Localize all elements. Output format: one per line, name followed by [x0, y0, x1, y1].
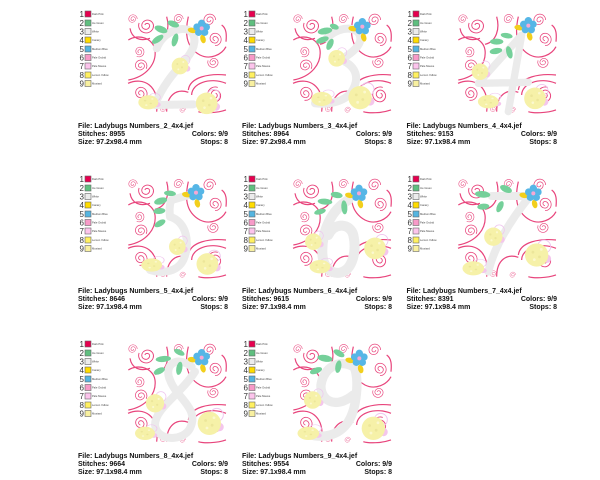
legend: White: [92, 194, 99, 198]
legend: [244, 10, 273, 88]
caption: [242, 453, 392, 476]
legend: Canary: [92, 368, 101, 372]
legend: 1: [408, 175, 413, 184]
caption: Size: 97.2x98.4 mm: [242, 139, 306, 146]
legend: Canary: [420, 203, 429, 207]
legend: Medium Blue: [92, 47, 108, 51]
legend: 8: [408, 236, 413, 245]
caption: Colors: 9/9: [521, 296, 557, 303]
legend: Pale Orchid: [92, 220, 107, 224]
legend: 9: [80, 80, 85, 88]
legend: 6: [408, 218, 413, 228]
legend: Pale Orchid: [256, 56, 271, 60]
legend: 2: [244, 184, 249, 193]
legend: Mustard: [420, 246, 430, 250]
legend: Medium Blue: [420, 47, 436, 51]
legend: 1: [244, 10, 249, 19]
legend: 3: [244, 358, 249, 366]
legend: 5: [244, 210, 249, 219]
legend: Pale Orchid: [92, 56, 107, 60]
caption: Colors: 9/9: [521, 131, 557, 138]
legend: 9: [244, 80, 249, 88]
caption: Stitches: 8646: [78, 296, 125, 303]
artwork: digit 9: [293, 344, 391, 443]
legend: 1: [408, 10, 413, 19]
legend: White: [92, 30, 99, 34]
legend: 6: [244, 384, 249, 392]
legend: [244, 175, 273, 254]
legend: 1: [80, 10, 85, 19]
legend: Pale Mauve: [92, 64, 107, 68]
legend: Canary: [420, 38, 429, 42]
legend: Dark Pink: [420, 177, 432, 181]
artwork: digit 4: [458, 14, 556, 113]
legend: 9: [80, 410, 85, 418]
legend: 5: [244, 45, 249, 54]
legend: Pale Orchid: [420, 220, 435, 224]
caption: [242, 288, 392, 311]
legend: Ice Green: [256, 21, 268, 25]
legend: 5: [408, 210, 413, 219]
legend: [244, 340, 273, 418]
caption: Stops: 8: [200, 469, 228, 476]
legend: 8: [244, 401, 249, 410]
legend: 1: [244, 340, 249, 349]
caption: Stitches: 8391: [406, 296, 454, 303]
legend: 5: [408, 45, 413, 54]
legend: 3: [80, 192, 85, 202]
legend: Pale Orchid: [256, 386, 271, 390]
caption: Colors: 9/9: [356, 296, 392, 303]
legend: 6: [80, 54, 85, 62]
caption: Stops: 8: [529, 139, 557, 146]
legend: Ice Green: [92, 351, 104, 355]
legend: 5: [80, 45, 85, 54]
caption: File: Ladybugs Numbers_7_4x4.jef: [406, 288, 522, 295]
legend: [80, 10, 109, 88]
panel: Ladybugs Numbers 8: [78, 340, 228, 476]
legend: Mustard: [92, 412, 102, 416]
caption: File: Ladybugs Numbers_4_4x4.jef: [406, 123, 522, 130]
legend: Pale Mauve: [92, 229, 107, 233]
artwork: digit 5: [128, 179, 226, 278]
caption: [242, 123, 392, 146]
caption: [406, 288, 557, 311]
artwork: digit 3: [293, 14, 391, 113]
legend: 7: [80, 62, 85, 71]
caption: [78, 288, 228, 311]
legend: 7: [244, 227, 249, 236]
legend: 6: [408, 54, 413, 62]
legend: Canary: [92, 38, 101, 42]
caption: Size: 97.1x98.4 mm: [78, 469, 142, 476]
caption: Colors: 9/9: [192, 296, 228, 303]
panel: Ladybugs Numbers 3: [242, 10, 392, 146]
legend: Medium Blue: [92, 212, 108, 216]
legend: 4: [80, 36, 85, 45]
legend: 3: [408, 192, 413, 202]
legend: Ice Green: [92, 186, 104, 190]
caption: Stitches: 9664: [78, 461, 125, 468]
legend: 9: [80, 244, 85, 254]
legend: Dark Pink: [92, 342, 104, 346]
legend: 4: [80, 366, 85, 375]
legend: 7: [244, 392, 249, 401]
caption: [406, 123, 557, 146]
legend: Lemon Yellow: [92, 403, 109, 407]
legend: Pale Mauve: [92, 394, 107, 398]
legend: 7: [80, 227, 85, 236]
legend: 2: [244, 19, 249, 28]
legend: Mustard: [256, 82, 266, 86]
legend: 9: [244, 410, 249, 418]
legend: 4: [244, 366, 249, 375]
legend: 6: [244, 218, 249, 228]
legend: White: [420, 30, 427, 34]
legend: 2: [408, 184, 413, 193]
legend: 7: [408, 227, 413, 236]
legend: [408, 175, 437, 254]
caption: Stops: 8: [200, 304, 228, 311]
panel: Ladybugs Numbers 7: [406, 175, 557, 311]
legend: Ice Green: [92, 21, 104, 25]
caption: Size: 97.1x98.4 mm: [406, 139, 470, 146]
legend: 4: [408, 36, 413, 45]
legend: Dark Pink: [256, 12, 268, 16]
caption: Size: 97.1x98.4 mm: [242, 469, 306, 476]
legend: 4: [408, 201, 413, 210]
legend: Medium Blue: [420, 212, 436, 216]
legend: Pale Mauve: [420, 229, 435, 233]
legend: 5: [244, 375, 249, 384]
legend: 8: [244, 236, 249, 245]
legend: White: [256, 30, 263, 34]
legend: Medium Blue: [92, 377, 108, 381]
caption: Size: 97.1x98.4 mm: [242, 304, 306, 311]
legend: Lemon Yellow: [256, 73, 273, 77]
legend: Ice Green: [420, 186, 432, 190]
legend: White: [256, 194, 263, 198]
legend: 4: [244, 201, 249, 210]
legend: 2: [244, 349, 249, 358]
legend: 9: [408, 244, 413, 254]
caption: Stitches: 9615: [242, 296, 289, 303]
caption: File: Ladybugs Numbers_2_4x4.jef: [78, 123, 194, 130]
artwork: digit 8: [128, 344, 226, 443]
legend: 2: [80, 19, 85, 28]
caption: Stitches: 9153: [406, 131, 454, 138]
legend: Pale Orchid: [256, 220, 271, 224]
panel: Ladybugs Numbers 2: [78, 10, 228, 146]
caption: Stitches: 9554: [242, 461, 289, 468]
legend: 1: [80, 340, 85, 349]
caption: [78, 123, 228, 146]
legend: Medium Blue: [256, 377, 272, 381]
legend: 8: [80, 71, 85, 80]
legend: 6: [80, 384, 85, 392]
legend: Lemon Yellow: [92, 238, 109, 242]
legend: Mustard: [92, 82, 102, 86]
legend: Medium Blue: [256, 47, 272, 51]
legend: 6: [244, 54, 249, 62]
legend: Lemon Yellow: [92, 73, 109, 77]
legend: Lemon Yellow: [256, 238, 273, 242]
caption: Size: 97.1x98.4 mm: [406, 304, 470, 311]
legend: 1: [244, 175, 249, 184]
caption: File: Ladybugs Numbers_3_4x4.jef: [242, 123, 358, 130]
legend: Dark Pink: [256, 342, 268, 346]
caption: File: Ladybugs Numbers_6_4x4.jef: [242, 288, 358, 295]
legend: 2: [80, 184, 85, 193]
legend: Mustard: [92, 246, 102, 250]
caption: File: Ladybugs Numbers_8_4x4.jef: [78, 453, 194, 460]
panel: Ladybugs Numbers 5: [78, 175, 228, 311]
legend: Ice Green: [256, 351, 268, 355]
legend: Canary: [256, 203, 265, 207]
panel: Ladybugs Numbers 9: [242, 340, 392, 476]
legend: [80, 175, 109, 254]
caption: Colors: 9/9: [356, 461, 392, 468]
legend: Lemon Yellow: [420, 238, 437, 242]
caption: Colors: 9/9: [356, 131, 392, 138]
legend: 1: [80, 175, 85, 184]
legend: 3: [244, 192, 249, 202]
legend: 7: [408, 62, 413, 71]
legend: Pale Mauve: [256, 229, 271, 233]
legend: Canary: [256, 368, 265, 372]
legend: Mustard: [256, 246, 266, 250]
caption: Stops: 8: [364, 469, 392, 476]
legend: Pale Orchid: [92, 386, 107, 390]
caption: File: Ladybugs Numbers_5_4x4.jef: [78, 288, 194, 295]
legend: Pale Mauve: [420, 64, 435, 68]
legend: [80, 340, 109, 418]
legend: 3: [80, 28, 85, 36]
legend: 2: [80, 349, 85, 358]
legend: Dark Pink: [420, 12, 432, 16]
legend: Mustard: [256, 412, 266, 416]
legend: 2: [408, 19, 413, 28]
legend: Medium Blue: [256, 212, 272, 216]
legend: Canary: [92, 203, 101, 207]
caption: Stitches: 8964: [242, 131, 289, 138]
legend: Lemon Yellow: [256, 403, 273, 407]
legend: Dark Pink: [256, 177, 268, 181]
legend: Ice Green: [420, 21, 432, 25]
legend: Pale Mauve: [256, 64, 271, 68]
legend: 8: [80, 236, 85, 245]
artwork: digit 7: [458, 179, 556, 278]
caption: Colors: 9/9: [192, 461, 228, 468]
caption: [78, 453, 228, 476]
legend: 7: [244, 62, 249, 71]
legend: 3: [80, 358, 85, 366]
legend: 4: [80, 201, 85, 210]
legend: 8: [244, 71, 249, 80]
legend: White: [420, 194, 427, 198]
legend: Pale Orchid: [420, 56, 435, 60]
legend: 7: [80, 392, 85, 401]
legend: Mustard: [420, 82, 430, 86]
legend: 5: [80, 375, 85, 384]
legend: [408, 10, 437, 88]
caption: Colors: 9/9: [192, 131, 228, 138]
legend: 9: [408, 80, 413, 88]
legend: Lemon Yellow: [420, 73, 437, 77]
caption: Size: 97.1x98.4 mm: [78, 304, 142, 311]
legend: 9: [244, 244, 249, 254]
caption: Size: 97.2x98.4 mm: [78, 139, 142, 146]
caption: Stitches: 8955: [78, 131, 125, 138]
panel: Ladybugs Numbers 4: [406, 10, 557, 146]
legend: Dark Pink: [92, 177, 104, 181]
legend: Ice Green: [256, 186, 268, 190]
legend: 3: [408, 28, 413, 36]
legend: Canary: [256, 38, 265, 42]
caption: Stops: 8: [529, 304, 557, 311]
artwork: digit 6: [293, 179, 391, 278]
legend: 4: [244, 36, 249, 45]
legend: 3: [244, 28, 249, 36]
artwork: digit 2: [128, 14, 226, 114]
caption: File: Ladybugs Numbers_9_4x4.jef: [242, 453, 358, 460]
legend: Dark Pink: [92, 12, 104, 16]
legend: White: [256, 360, 263, 364]
legend: 8: [408, 71, 413, 80]
legend: Pale Mauve: [256, 394, 271, 398]
panel: Ladybugs Numbers 6: [242, 175, 392, 311]
caption: Stops: 8: [200, 139, 228, 146]
legend: 8: [80, 401, 85, 410]
legend: White: [92, 360, 99, 364]
caption: Stops: 8: [364, 304, 392, 311]
legend: 6: [80, 218, 85, 228]
legend: 5: [80, 210, 85, 219]
caption: Stops: 8: [364, 139, 392, 146]
